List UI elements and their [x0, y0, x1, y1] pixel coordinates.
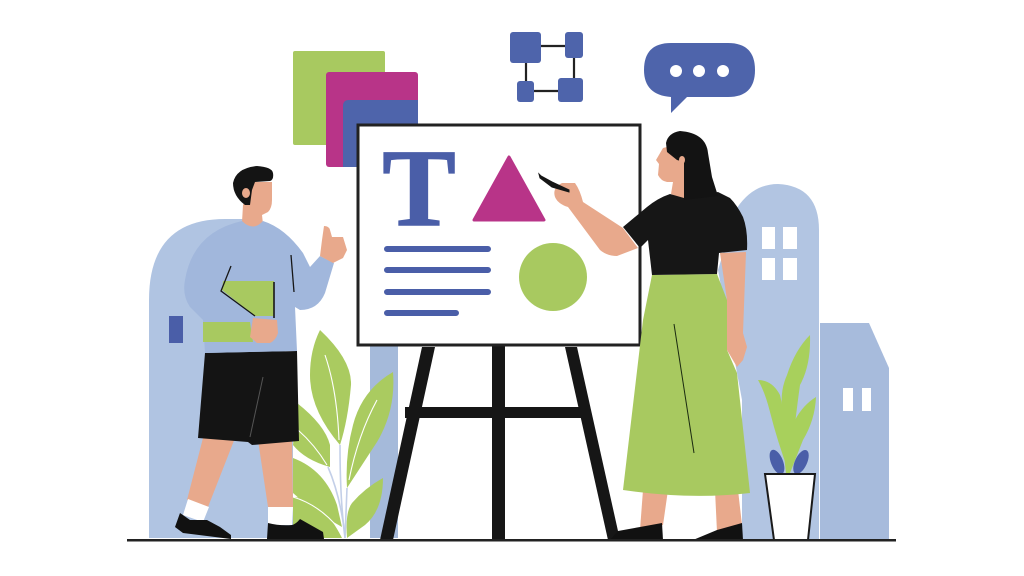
tall right building [718, 184, 819, 540]
potted plant blue leaves [767, 448, 787, 476]
man shoes [175, 513, 324, 539]
man hand on notebook [250, 318, 278, 343]
man with notebook [175, 166, 347, 539]
potted plant [758, 335, 816, 540]
woman legs [640, 490, 742, 532]
ground line [127, 539, 896, 542]
man arm details [221, 255, 294, 318]
icon: node network [510, 32, 583, 102]
woman lowered arm [720, 252, 747, 367]
icon: speech bubble [644, 43, 755, 113]
man hair [233, 166, 273, 205]
potted plant leaves [758, 335, 816, 473]
short right building [820, 323, 889, 540]
overlapping colour squares [293, 51, 418, 167]
woman shirt [623, 192, 747, 275]
woman neck and face [656, 145, 690, 200]
woman skirt [623, 274, 750, 496]
man shorts [198, 351, 299, 445]
green circle [519, 243, 587, 311]
blue pillar behind board [370, 340, 398, 538]
text lines [387, 249, 488, 313]
pen [539, 174, 569, 192]
man socks [183, 499, 293, 525]
woman shoes [610, 523, 743, 540]
woman ear [679, 156, 685, 164]
man legs [187, 438, 293, 507]
left plant [293, 330, 393, 538]
magenta triangle [474, 157, 544, 220]
letter T: T [382, 127, 456, 249]
woman hair [666, 131, 718, 200]
man sweater torso [184, 221, 334, 353]
easel [380, 345, 620, 540]
presentation board [358, 125, 640, 345]
man notebook [203, 281, 274, 342]
man thumbs up hand [320, 226, 347, 263]
man neck and face [242, 182, 272, 232]
plant pot [765, 474, 815, 540]
man ear [242, 188, 250, 198]
woman raised arm [554, 183, 638, 256]
woman presenter [539, 131, 750, 540]
left background building [149, 219, 293, 538]
